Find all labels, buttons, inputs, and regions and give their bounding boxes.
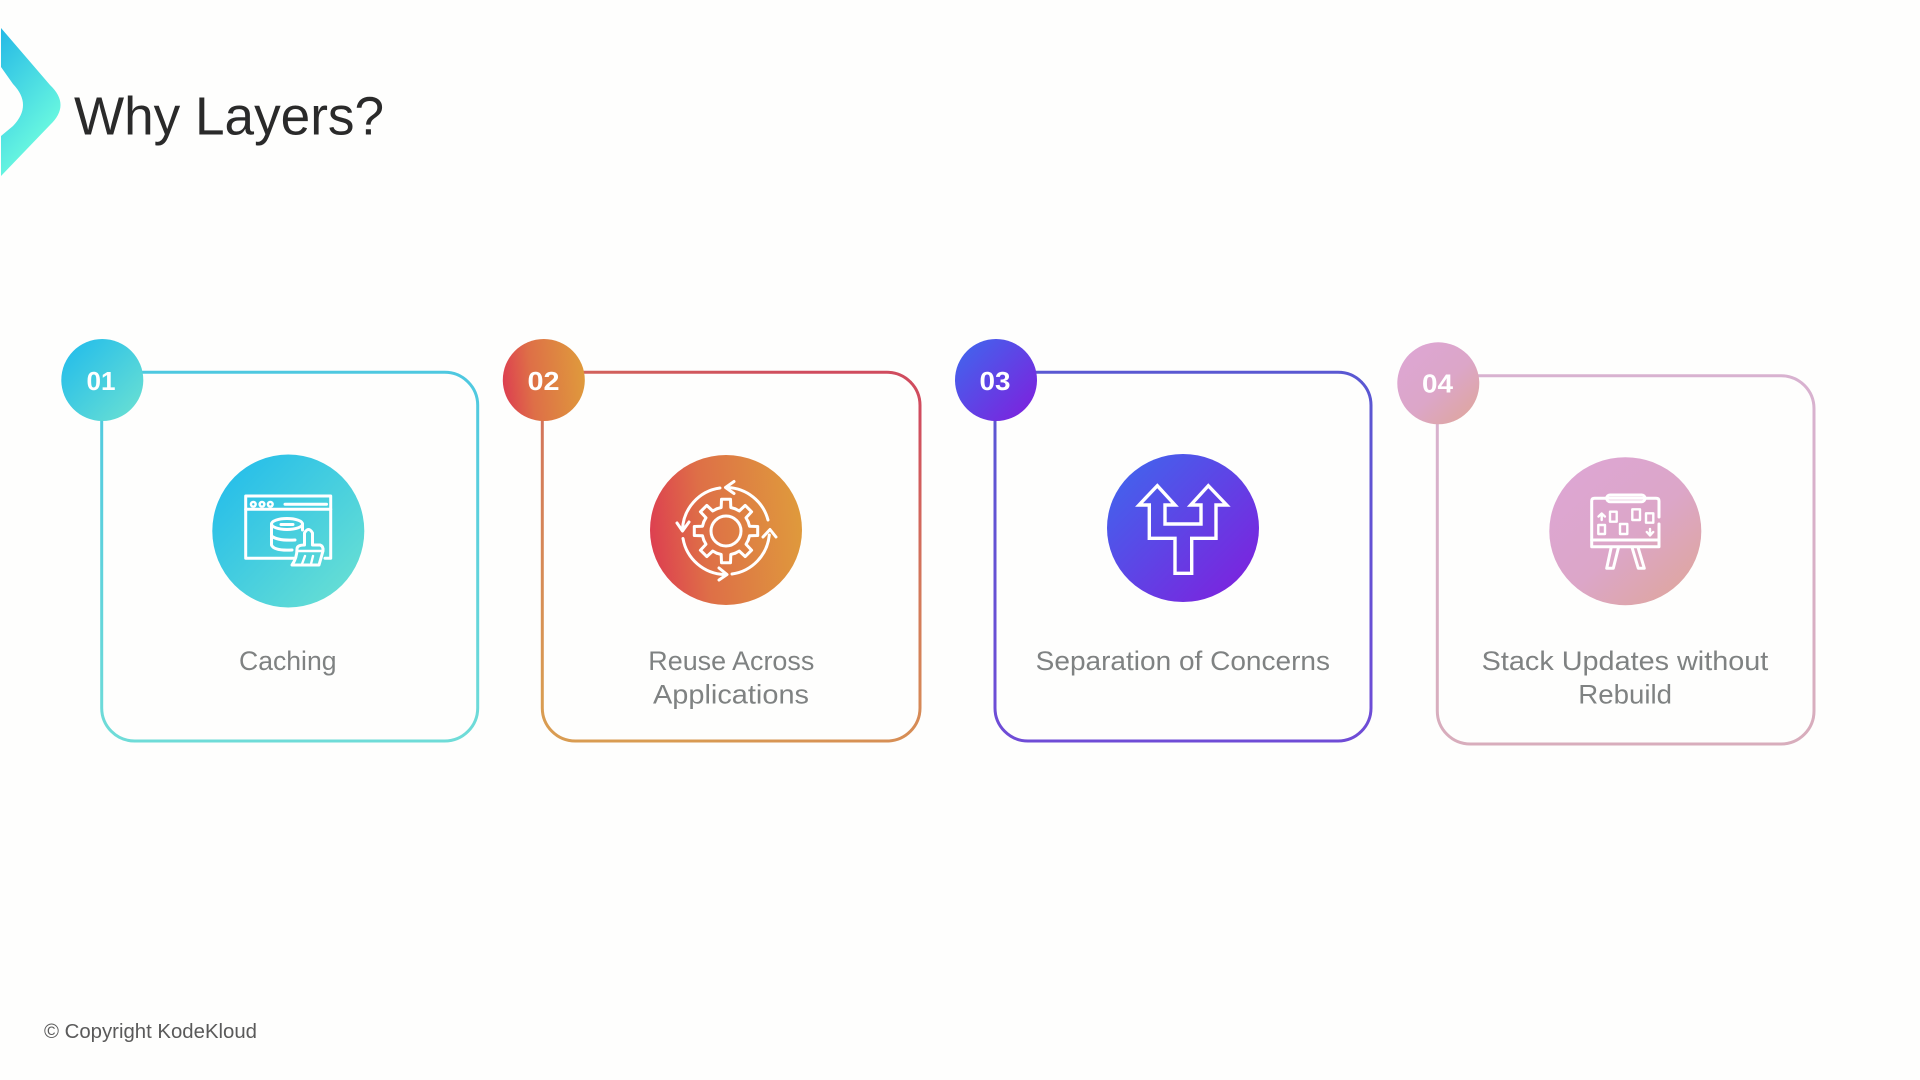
number badge 03 [955,339,1037,421]
card outline 02 [542,372,920,741]
icon: presentation board [1549,457,1701,605]
caption 04: Stack Updates without [1482,646,1769,676]
panel: 02 Reuse Across Applications [503,339,920,741]
card outline 03 [995,372,1371,741]
icon: header chevron [1,28,60,176]
number badge 04 [1397,342,1479,424]
number badge 01: 01 [86,366,116,396]
icon: browser window with database and brush [212,454,364,608]
title: Why Layers? [74,86,384,146]
caption 01: Caching [239,646,336,676]
icon: gear with circular arrows [650,455,802,605]
number badge 04: 04 [1422,368,1454,398]
number badge 03: 03 [980,366,1010,396]
panel: 04 Stack Updates without Rebuild [1397,342,1814,744]
icon: forking arrows [1107,454,1259,602]
number badge 02: 02 [528,366,560,396]
card outline 01 [102,372,478,741]
caption 02: Applications [653,679,809,709]
footer copyright: © Copyright KodeKloud [44,1021,257,1043]
number badge 02 [503,339,585,421]
caption 02: Reuse Across [648,646,814,676]
caption 03: Separation of Concerns [1036,646,1330,676]
panel: 01 Caching [61,339,478,741]
caption 04: Rebuild [1578,679,1672,709]
number badge 01 [61,339,143,421]
panel: 03 Separation of Concerns [955,339,1371,741]
card outline 04 [1437,376,1814,744]
